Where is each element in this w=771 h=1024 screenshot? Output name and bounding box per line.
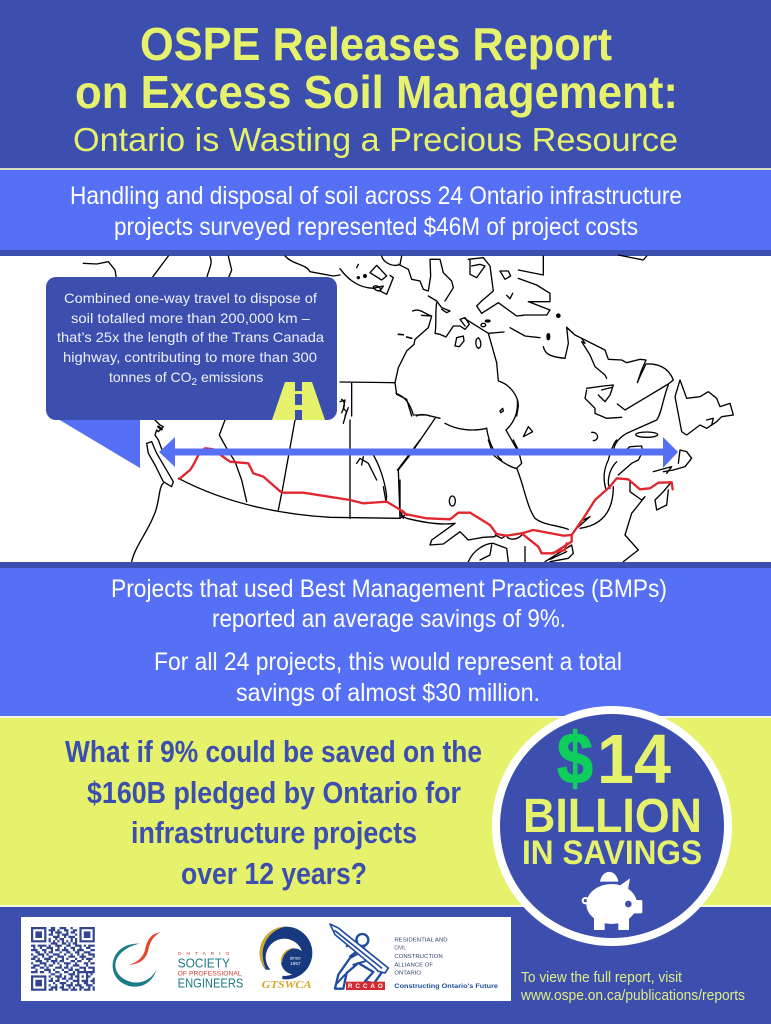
billion label: BILLION <box>523 790 702 843</box>
logo: RCCAO: RESIDENTIAL AND <box>394 937 448 943</box>
logo: RCCAO: RCCAO <box>348 983 383 990</box>
question text <box>65 734 482 891</box>
logo: RCCAO <box>330 924 499 990</box>
report link text: www.ospe.on.ca/publications/reports <box>520 987 745 1004</box>
QR code <box>31 928 95 990</box>
callout text: 2 <box>192 377 198 388</box>
title <box>73 18 678 158</box>
logo: RCCAO: CIVIL <box>394 946 406 952</box>
callout text: highway, contributing to more than 300 <box>63 349 317 365</box>
logo: RCCAO: Constructing Ontario's Future <box>394 984 499 990</box>
panel: best management practices <box>0 562 771 716</box>
savings text: Projects that used Best Management Practices (BMPs) <box>111 575 667 603</box>
in savings label: IN SAVINGS <box>522 834 702 872</box>
logo: GTSWCA <box>260 927 312 991</box>
panel: project costs banner <box>0 170 771 256</box>
savings text <box>111 575 667 707</box>
icon: piggy bank <box>583 872 642 930</box>
big number: 14 <box>597 720 671 798</box>
badge: 14 billion in savings <box>492 706 732 946</box>
savings text: For all 24 projects, this would represent a total <box>154 648 622 676</box>
logo: RCCAO: ALLIANCE OF <box>394 962 434 968</box>
banner text: projects surveyed represented $46M of project costs <box>114 213 638 241</box>
logo: OSPE: SOCIETY <box>178 957 231 971</box>
banner text <box>70 182 682 241</box>
double arrow spanning Canada <box>159 437 678 468</box>
highway route in red <box>179 448 673 553</box>
logo: OSPE: ONTARIO <box>178 951 229 957</box>
callout text <box>57 290 324 388</box>
savings text: savings of almost $30 million. <box>236 679 540 707</box>
callout text: soil totalled more than 200,000 km – <box>71 310 310 326</box>
logo: GTSWCA: 1957 <box>290 961 301 966</box>
callout text: Combined one-way travel to dispose of <box>64 290 317 306</box>
callout text: emissions <box>197 369 263 385</box>
panel: footer <box>0 907 771 1024</box>
report link text <box>520 969 745 1004</box>
logo: GTSWCA: GTSWCA <box>262 980 312 991</box>
logo: RCCAO: CONSTRUCTION <box>394 954 443 960</box>
logo strip <box>21 917 511 1001</box>
callout text: tonnes of CO <box>109 369 192 385</box>
logo: GTSWCA: since <box>290 955 301 960</box>
logo: OSPE <box>113 932 243 990</box>
map of Canada <box>83 255 733 562</box>
logo: OSPE: OF PROFESSIONAL <box>178 970 242 977</box>
question text: infrastructure projects <box>131 815 417 850</box>
panel: header <box>0 0 771 168</box>
banner text: Handling and disposal of soil across 24 Ontario infrastructure <box>70 182 682 210</box>
report link text: To view the full report, visit <box>521 969 683 986</box>
question text: over 12 years? <box>181 856 367 891</box>
big number: $ <box>557 719 593 799</box>
question text: $160B pledged by Ontario for <box>87 775 461 810</box>
title: Ontario is Wasting a Precious Resource <box>73 121 678 158</box>
icon: road <box>272 382 325 420</box>
savings text: reported an average savings of 9%. <box>212 605 566 633</box>
title: OSPE Releases Report <box>140 18 612 70</box>
big number <box>557 719 671 799</box>
callout: travel distance <box>46 277 337 468</box>
logo: OSPE: ENGINEERS <box>178 975 243 990</box>
panel: what if question <box>0 718 771 905</box>
title: on Excess Soil Management: <box>75 66 678 118</box>
logo: RCCAO: ONTARIO <box>394 971 421 977</box>
callout text: that’s 25x the length of the Trans Canada <box>57 329 324 345</box>
question text: What if 9% could be saved on the <box>65 734 482 769</box>
